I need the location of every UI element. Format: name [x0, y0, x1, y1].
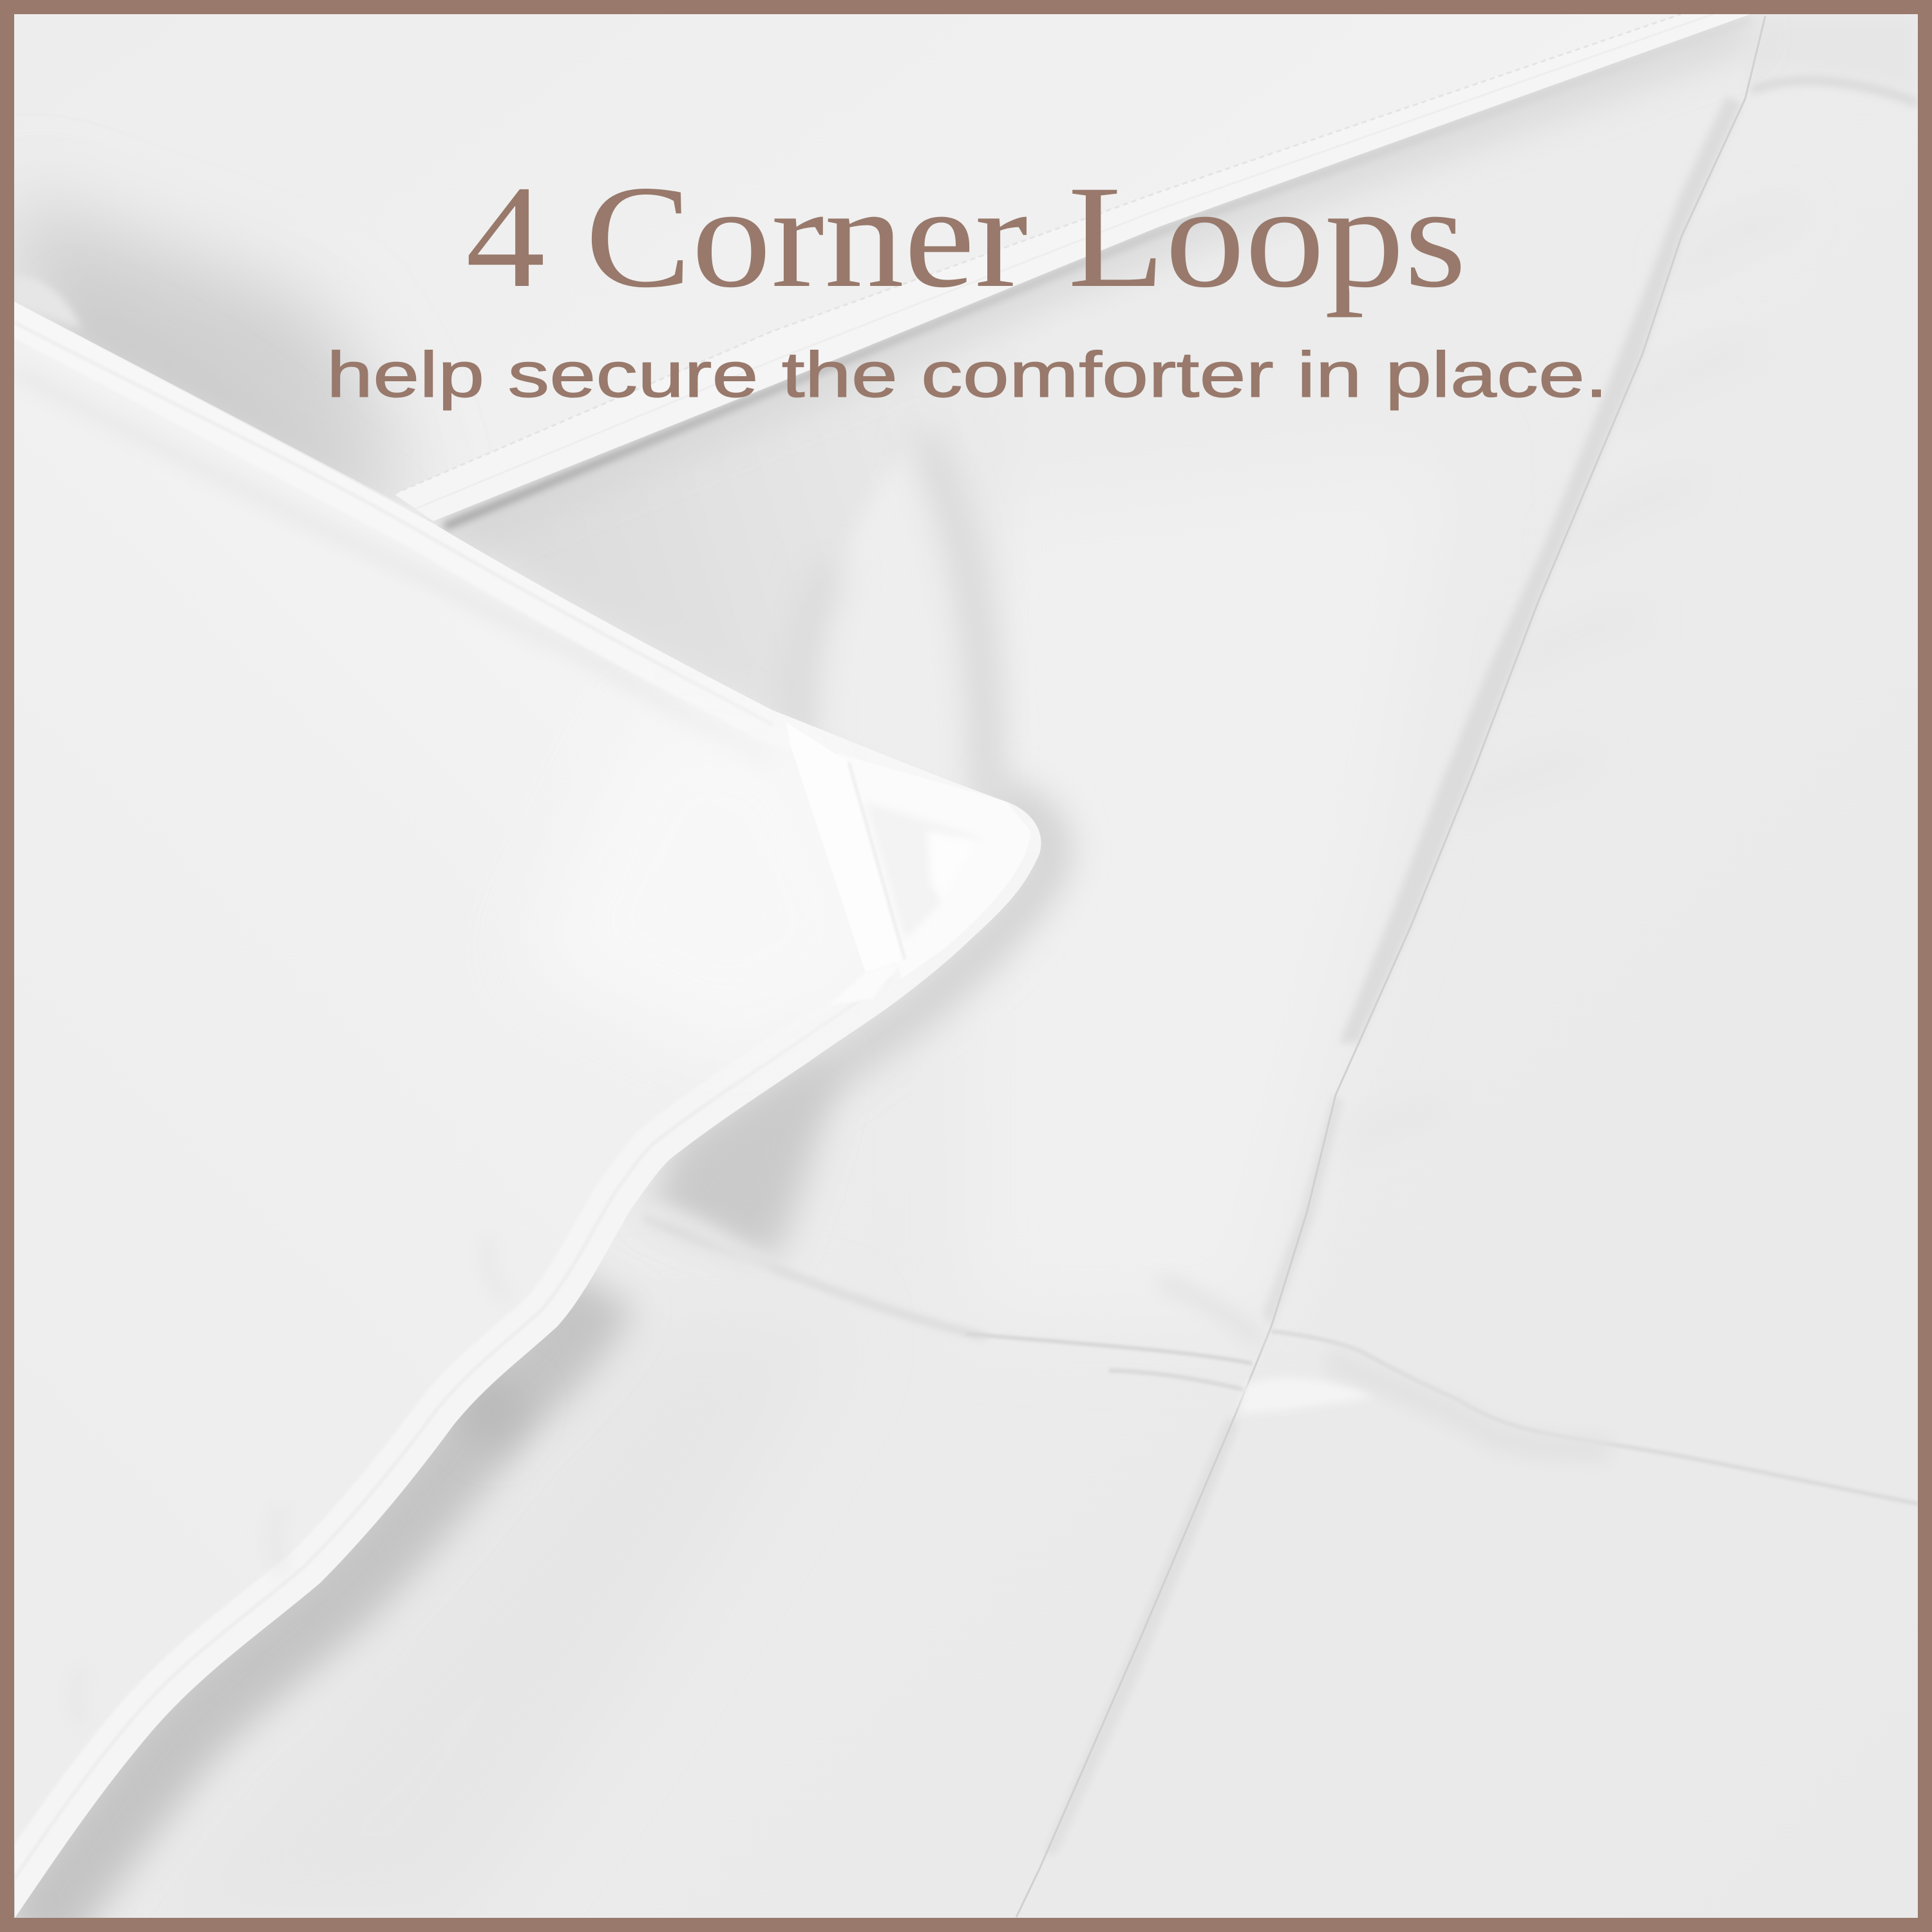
loop pocket: [837, 753, 1030, 979]
seam gloss band: [1340, 97, 1742, 1043]
binding puckers: [75, 1236, 509, 1726]
flap shadow from pillow: [14, 193, 433, 528]
top comforter flap: [14, 14, 1750, 531]
centre panel soft highlight: [966, 451, 1449, 1320]
flap hem band: [394, 14, 1750, 521]
title: 4 Corner Loops: [466, 156, 1466, 318]
top binding stitch: [14, 322, 773, 724]
flap stitch lines: [394, 14, 1681, 494]
binding stitch: [0, 977, 891, 1902]
folded corner panel with loop: [0, 301, 1041, 1918]
right quilted panel wrinkles: [1346, 213, 1797, 1146]
lower seam band: [1043, 1095, 1343, 1855]
corner loop bump: [810, 444, 976, 799]
horizontal quilting creases: [644, 1217, 1918, 1504]
flap body: [14, 14, 1750, 521]
top binding band: [14, 301, 1007, 802]
bright area near the corner: [515, 708, 902, 1063]
shading beneath top binding: [14, 370, 773, 763]
lower binding band: [15, 854, 1039, 1918]
corner loop strap: [786, 723, 905, 972]
dent shadow under the top flap: [425, 258, 1095, 811]
flap cast shadow: [444, 24, 1750, 531]
vertical quilting seam stitches: [1016, 16, 1765, 1917]
top right corner crease: [1745, 14, 1918, 97]
flap edge dark line: [444, 19, 1750, 527]
shadows around the folded corner: [26, 799, 1050, 1932]
subtitle: help secure the comforter in place.: [327, 339, 1608, 411]
